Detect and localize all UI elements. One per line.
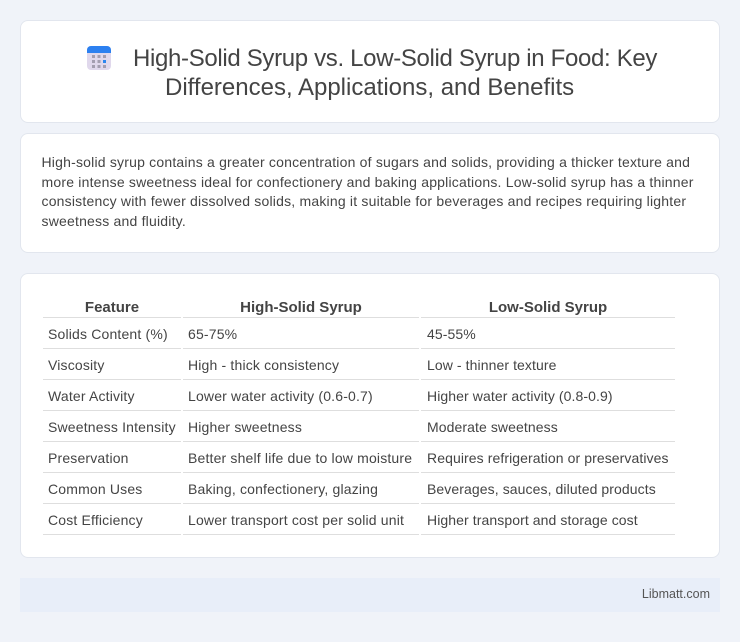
comparison table: Low-Solid Syrup [489, 299, 607, 316]
intro paragraph: more intense sweetness ideal for confectionery and baking applications. Low-solid syrup has a thinner [42, 174, 694, 190]
icon: calendar [87, 46, 111, 70]
comparison table: High - thick consistency [188, 357, 339, 373]
comparison table: 45-55% [427, 326, 476, 342]
comparison table: Higher transport and storage cost [427, 512, 638, 528]
title card [20, 20, 720, 123]
comparison table: Common Uses [48, 481, 142, 497]
comparison table: Better shelf life due to low moisture [188, 450, 412, 466]
comparison table: Cost Efficiency [48, 512, 143, 528]
comparison table: Low - thinner texture [427, 357, 557, 373]
comparison table: 65-75% [188, 326, 237, 342]
intro paragraph: consistency with fewer dissolved solids, making it suitable for beverages and recipes requiring lighter [42, 193, 686, 209]
footer bar [20, 578, 720, 612]
comparison table: Beverages, sauces, diluted products [427, 481, 656, 497]
table card [20, 273, 720, 558]
intro paragraph: High-solid syrup contains a greater concentration of sugars and solids, providing a thicker texture and [42, 154, 690, 170]
comparison table: Lower transport cost per solid unit [188, 512, 404, 528]
comparison table: Sweetness Intensity [48, 419, 176, 435]
comparison table: Viscosity [48, 357, 105, 373]
intro paragraph [42, 154, 694, 229]
comparison table: Baking, confectionery, glazing [188, 481, 378, 497]
comparison table: Requires refrigeration or preservatives [427, 450, 669, 466]
footer credit: Libmatt.com [642, 587, 710, 601]
comparison table: Preservation [48, 450, 129, 466]
intro paragraph: sweetness and fluidity. [42, 213, 186, 229]
intro card [20, 133, 720, 253]
comparison table [43, 299, 675, 535]
comparison table: Water Activity [48, 388, 135, 404]
heading line 2: Differences, Applications, and Benefits [165, 74, 574, 101]
comparison table: Higher water activity (0.8-0.9) [427, 388, 613, 404]
comparison table: Feature [85, 299, 139, 316]
comparison table: Solids Content (%) [48, 326, 168, 342]
comparison table: High-Solid Syrup [240, 299, 362, 316]
comparison table: Lower water activity (0.6-0.7) [188, 388, 373, 404]
comparison table: Moderate sweetness [427, 419, 558, 435]
heading: High-Solid Syrup vs. Low-Solid Syrup in Food: Key [133, 45, 657, 72]
comparison table: Higher sweetness [188, 419, 302, 435]
